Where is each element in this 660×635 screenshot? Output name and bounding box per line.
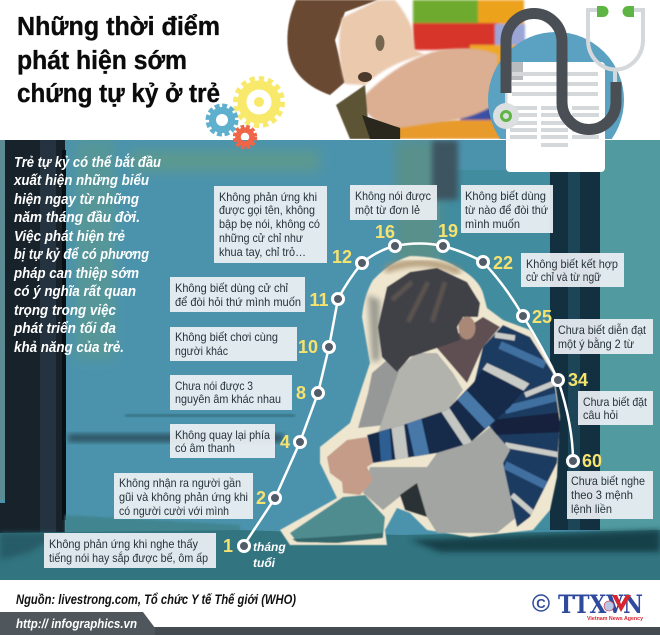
chest piece [505,93,508,107]
milestone: 16 months: một từ đơn lẻ [355,203,420,217]
block tower [395,0,525,139]
gears [208,78,282,148]
milestone: 16 months: 16 [375,222,395,242]
milestone: 25 months: một ý bằng 2 từ [558,336,634,351]
milestone: 34 months: Chưa biết đặt [583,395,648,409]
photo: child hugging knees [280,256,565,545]
milestone: 8 months: Chưa nói được 3 [175,379,253,393]
intro paragraph: xuất hiện những biểu [13,173,149,189]
milestone: 19 months [438,185,553,252]
milestone: 25 months: Chưa biết diễn đạt [558,322,647,337]
cream halo outline [280,256,560,545]
icon: yellow gear [236,78,282,126]
milestone: 19 months: Không biết dùng [465,189,546,203]
title [17,13,220,108]
milestone: 60 months: theo 3 mệnh [571,488,633,502]
milestone: 4 months: 4 [280,432,290,452]
logo: copyright and TTXVN: TTXVN [558,590,643,619]
milestone: 16 months [350,185,437,252]
milestone: 8 months: nguyên âm khác nhau [175,392,281,406]
title: phát hiện sớm [17,47,187,75]
floor [65,515,240,535]
title: Những thời điểm [17,13,220,41]
milestone: 22 months [478,253,624,287]
photo panel background [0,140,660,580]
milestone: 11 months: Không biết dùng cử chỉ [175,281,288,295]
milestone: 1 month: Không phản ứng khi nghe thấy [49,537,198,551]
sock [290,495,385,543]
milestone: 60 months: 60 [582,451,602,471]
intro paragraph: Việc phát hiện trẻ [14,229,125,245]
photo: boy playing with blocks [287,0,525,139]
back knee [358,360,402,428]
left door frame [0,140,5,500]
milestone: 10 months [170,327,334,361]
milestone: 8 months: 8 [296,383,306,403]
intro paragraph: có ý nghĩa rất quan [14,284,136,300]
milestone: 60 months: Chưa biết nghe [571,474,645,488]
milestone: 10 months: Không biết chơi cùng [175,330,278,344]
milestone: 25 months: 25 [532,307,552,327]
intro paragraph: năm tháng đầu đời. [14,210,140,226]
milestone: 22 months: cử chỉ và từ ngữ [526,270,601,284]
logo: copyright and TTXVN: C [536,596,546,611]
milestone: 8 months [170,375,324,410]
intro paragraph: pháp can thiệp sớm [13,266,139,282]
milestone: 16 months: Không nói được [355,189,431,203]
milestone: 2 months [114,473,280,519]
milestone: 19 months: 19 [438,221,458,241]
milestone: 4 months: Không quay lại phía [175,428,270,442]
hand [365,48,498,128]
milestone: 25 months [518,307,653,354]
hands [327,437,373,495]
milestone: 10 months: người khác [175,344,228,358]
milestone: 1 month: 1 [223,536,233,556]
milestone: 22 months: Không biết kết hợp [526,257,618,271]
milestone: 19 months: mình muốn [465,217,520,231]
milestone: 11 months: để đòi hỏi thứ mình muốn [175,295,301,309]
milestone: 4 months [170,424,306,458]
milestone: 60 months: lệnh liền [571,502,612,516]
front knee [377,353,463,436]
milestone: 12 months: Không phản ứng khi [219,190,317,204]
milestone: 60 months [567,451,653,519]
right door [550,170,600,530]
intro paragraph: hiện ngay từ những [14,192,139,208]
blurred grey behind head [368,295,380,362]
striped sleeve [366,362,530,464]
wall shadow bands [68,434,283,442]
milestone: 19 months: từ nào để đòi thứ [465,203,548,217]
milestone: 12 months [214,186,368,268]
blurred top greens [75,140,115,360]
milestone: 1 month: tuổi [253,556,276,570]
intro paragraph: trọng trong việc [14,303,116,319]
milestone: 34 months: câu hỏi [583,408,618,422]
main tube [506,14,616,130]
milestone: 1 month: tiếng nói hay sắp được bế, ôm ấp [49,550,208,565]
milestone: 12 months: những cử chỉ như [219,231,303,245]
ear tube [586,10,645,84]
footer bar with url: http:// infographics.vn [16,616,137,631]
milestone: 2 months: Không nhận ra người gần [119,476,241,490]
milestone: 4 months: có âm thanh [175,441,235,455]
logo: copyright and TTXVN [533,590,643,622]
earpieces [597,6,608,17]
right wall [600,140,660,535]
milestone: 22 months: 22 [493,253,513,273]
title: chứng tự kỷ ở trẻ [17,80,220,108]
milestone: 34 months: 34 [568,370,588,390]
intro paragraph: phát triển tối đa [13,321,116,337]
milestone: 11 months: 11 [309,290,329,310]
intro paragraph [13,153,161,356]
milestone: 34 months [552,370,653,425]
icon: red gear [234,126,256,148]
hair highlight [392,282,445,322]
report sheet [506,62,605,172]
hair [287,0,378,95]
hair [378,268,480,372]
milestone: 12 months: được gọi tên, không [219,203,315,217]
brown blur above head [385,263,460,272]
milestone: 1 month [44,533,286,570]
blue circle [488,32,624,139]
ear [458,316,476,340]
milestone: 2 months: có người cười với mình [119,504,229,518]
milestone curve [244,244,573,545]
intro paragraph: Trẻ tự kỷ có thể bắt đầu [14,153,161,171]
logo: copyright and TTXVN: Vietnam News Agency [587,616,643,622]
milestone: 12 months: 12 [332,247,352,267]
milestone: 10 months: 10 [298,337,318,357]
icon: blue gear [208,106,236,134]
milestone: 2 months: 2 [256,488,266,508]
face shadow [437,317,500,383]
striped shirt [474,324,561,528]
milestone: 12 months: bập bẹ nói, không có [219,217,320,231]
milestone: 11 months [170,277,344,312]
milestone: 2 months: gũi và không phản ứng khi [119,490,248,504]
milestone: 1 month: tháng [253,540,286,554]
source line: Nguồn: livestrong.com, Tổ chức Y tế Thế giới (WHO) [16,592,296,607]
lower pants [363,427,517,533]
sleeve [336,85,400,139]
icon: stethoscope and medical report [488,6,645,172]
milestone: 12 months: khua tay, chỉ trỏ… [219,245,306,259]
face [339,0,425,85]
intro paragraph: khả năng của trẻ. [14,340,124,356]
footer bar with url [0,612,660,635]
intro paragraph: bị tự kỷ để có phương [14,247,149,263]
